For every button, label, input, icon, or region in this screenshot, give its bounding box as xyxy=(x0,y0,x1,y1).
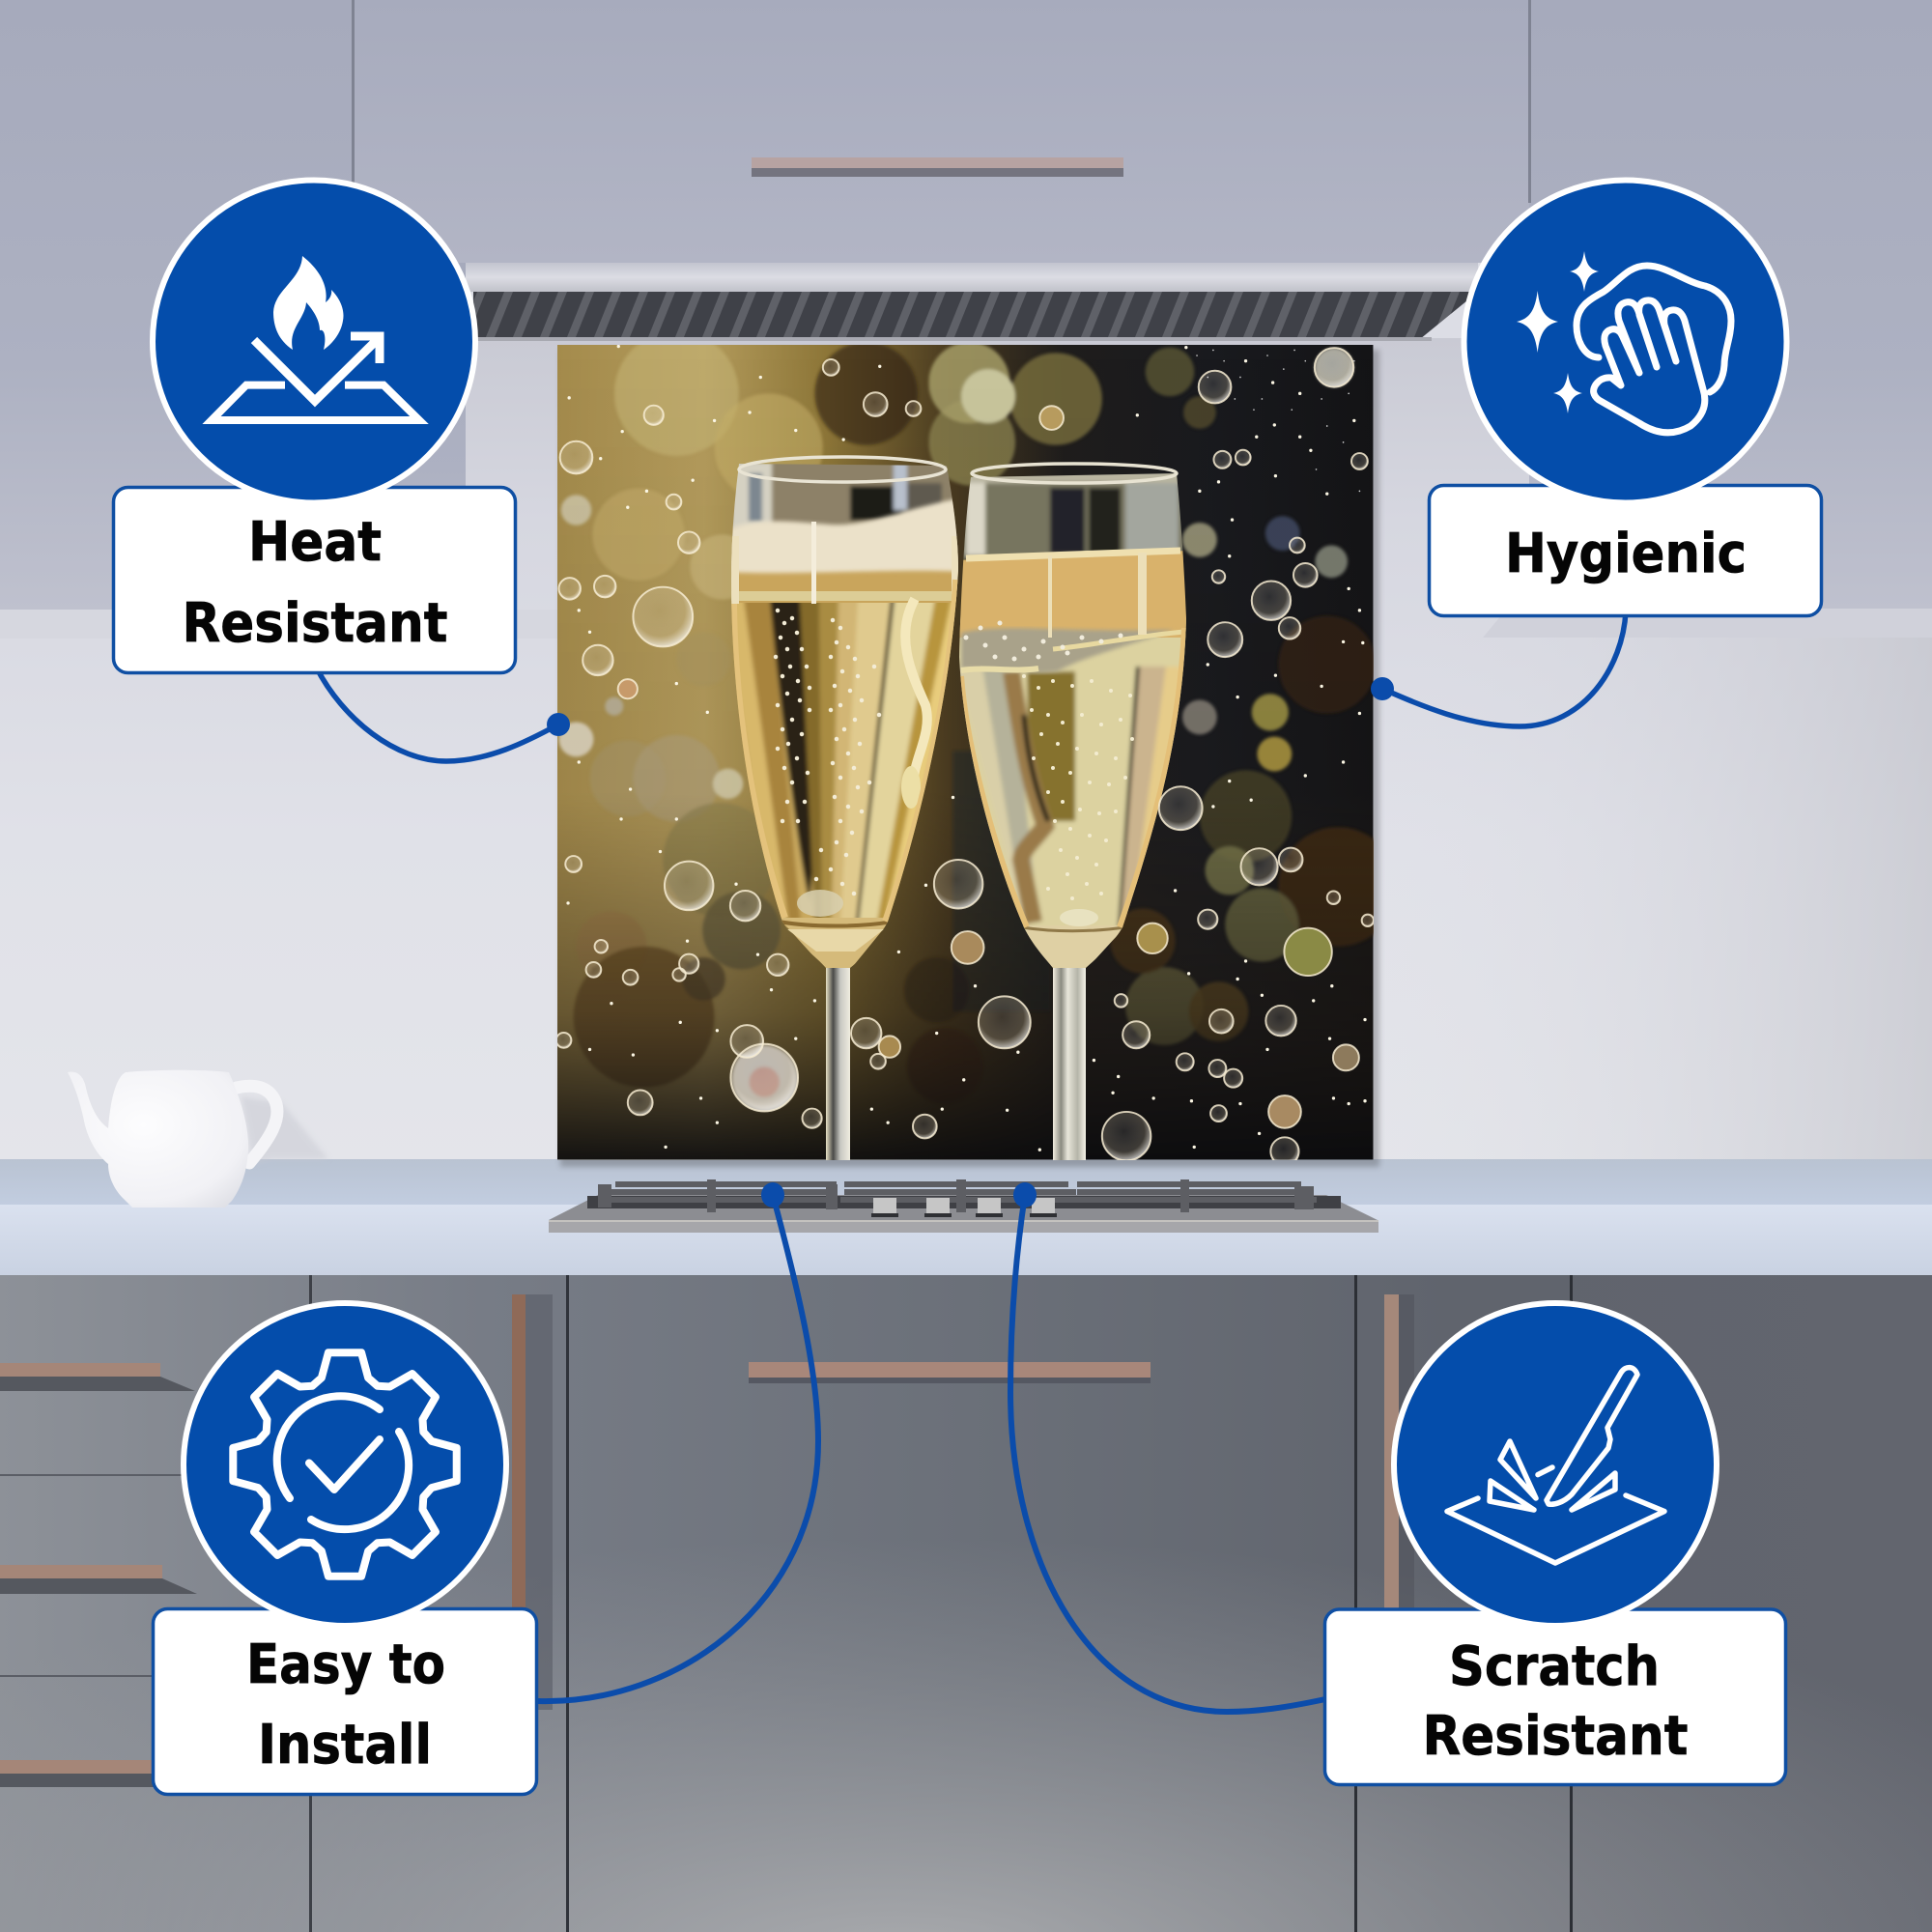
callout: heat resistant xyxy=(114,180,570,761)
right upper cabinet xyxy=(1529,0,1932,609)
countertop back surface xyxy=(0,1159,1932,1206)
cabinet handles xyxy=(0,1294,1414,1787)
connector: scratch resistant xyxy=(1010,1182,1325,1712)
left glass foam xyxy=(724,497,966,604)
callout: hygienic xyxy=(1371,180,1822,726)
label text: easy to install: Install xyxy=(258,1714,432,1776)
top cabinet handle xyxy=(752,157,1123,177)
left glass wave reflection xyxy=(905,599,927,787)
extractor hood xyxy=(466,263,1478,341)
callout: scratch resistant xyxy=(1010,1182,1785,1785)
label text: scratch resistant: Resistant xyxy=(1422,1705,1689,1768)
connector: easy to install xyxy=(538,1182,818,1701)
right glass lower liquid xyxy=(952,618,1193,937)
base cabinets xyxy=(0,1275,1932,1932)
left champagne glass xyxy=(724,454,966,1161)
badge circle: heat resistant xyxy=(153,180,475,502)
icon: hand wiping with sparkles xyxy=(1517,251,1731,433)
right glass gold band and sparkle xyxy=(956,551,1188,672)
cooktop xyxy=(549,1179,1378,1233)
painting background and bokeh xyxy=(557,331,1398,1159)
connector: heat resistant xyxy=(316,667,570,761)
left glass upper empty part xyxy=(732,464,956,536)
wall xyxy=(0,338,1932,1169)
callout: easy to install xyxy=(153,1182,818,1795)
connector: hygienic xyxy=(1371,611,1626,726)
icon: gear with check mark xyxy=(233,1352,457,1577)
right glass bowl base xyxy=(1023,925,1123,968)
label text: scratch resistant: Scratch xyxy=(1449,1635,1660,1698)
badge circle: easy to install xyxy=(184,1303,506,1626)
icon: flame over surface with arrow xyxy=(212,256,419,420)
right glass upper empty part xyxy=(963,473,1183,560)
countertop front xyxy=(0,1205,1932,1275)
label text: hygienic: Hygienic xyxy=(1505,523,1747,585)
teapot xyxy=(68,1070,328,1208)
icon: knife scratching surface xyxy=(1447,1368,1664,1563)
right glass gold edges xyxy=(960,628,1185,927)
label box: hygienic xyxy=(1430,485,1822,616)
left glass liquid bands xyxy=(724,594,966,927)
label text: easy to install: Easy to xyxy=(246,1634,445,1696)
bubbles inside glasses xyxy=(776,611,1132,898)
wall shading at right xyxy=(1374,618,1932,1169)
centre upper cabinet xyxy=(354,0,1529,263)
label text: heat resistant: Heat xyxy=(248,511,382,574)
label box: scratch resistant xyxy=(1325,1609,1785,1785)
left cabinet lower section xyxy=(354,263,466,610)
left glass bowl base xyxy=(779,918,893,970)
right cabinet underside xyxy=(1483,609,1932,638)
left glass rim xyxy=(739,457,946,482)
floating bubbles and sparkles xyxy=(556,347,1374,1165)
splashback panel: champagne painting xyxy=(556,331,1398,1167)
label text: heat resistant: Resistant xyxy=(182,592,448,655)
left upper cabinet xyxy=(0,0,354,610)
left cabinet underside xyxy=(0,610,558,639)
right glass rim xyxy=(972,464,1177,483)
badge circle: hygienic xyxy=(1464,180,1787,502)
badge circle: scratch resistant xyxy=(1394,1303,1717,1626)
label box: easy to install xyxy=(153,1609,537,1795)
left glass gold edges xyxy=(733,580,956,922)
right champagne glass xyxy=(952,462,1193,1161)
label box: heat resistant xyxy=(114,487,516,672)
